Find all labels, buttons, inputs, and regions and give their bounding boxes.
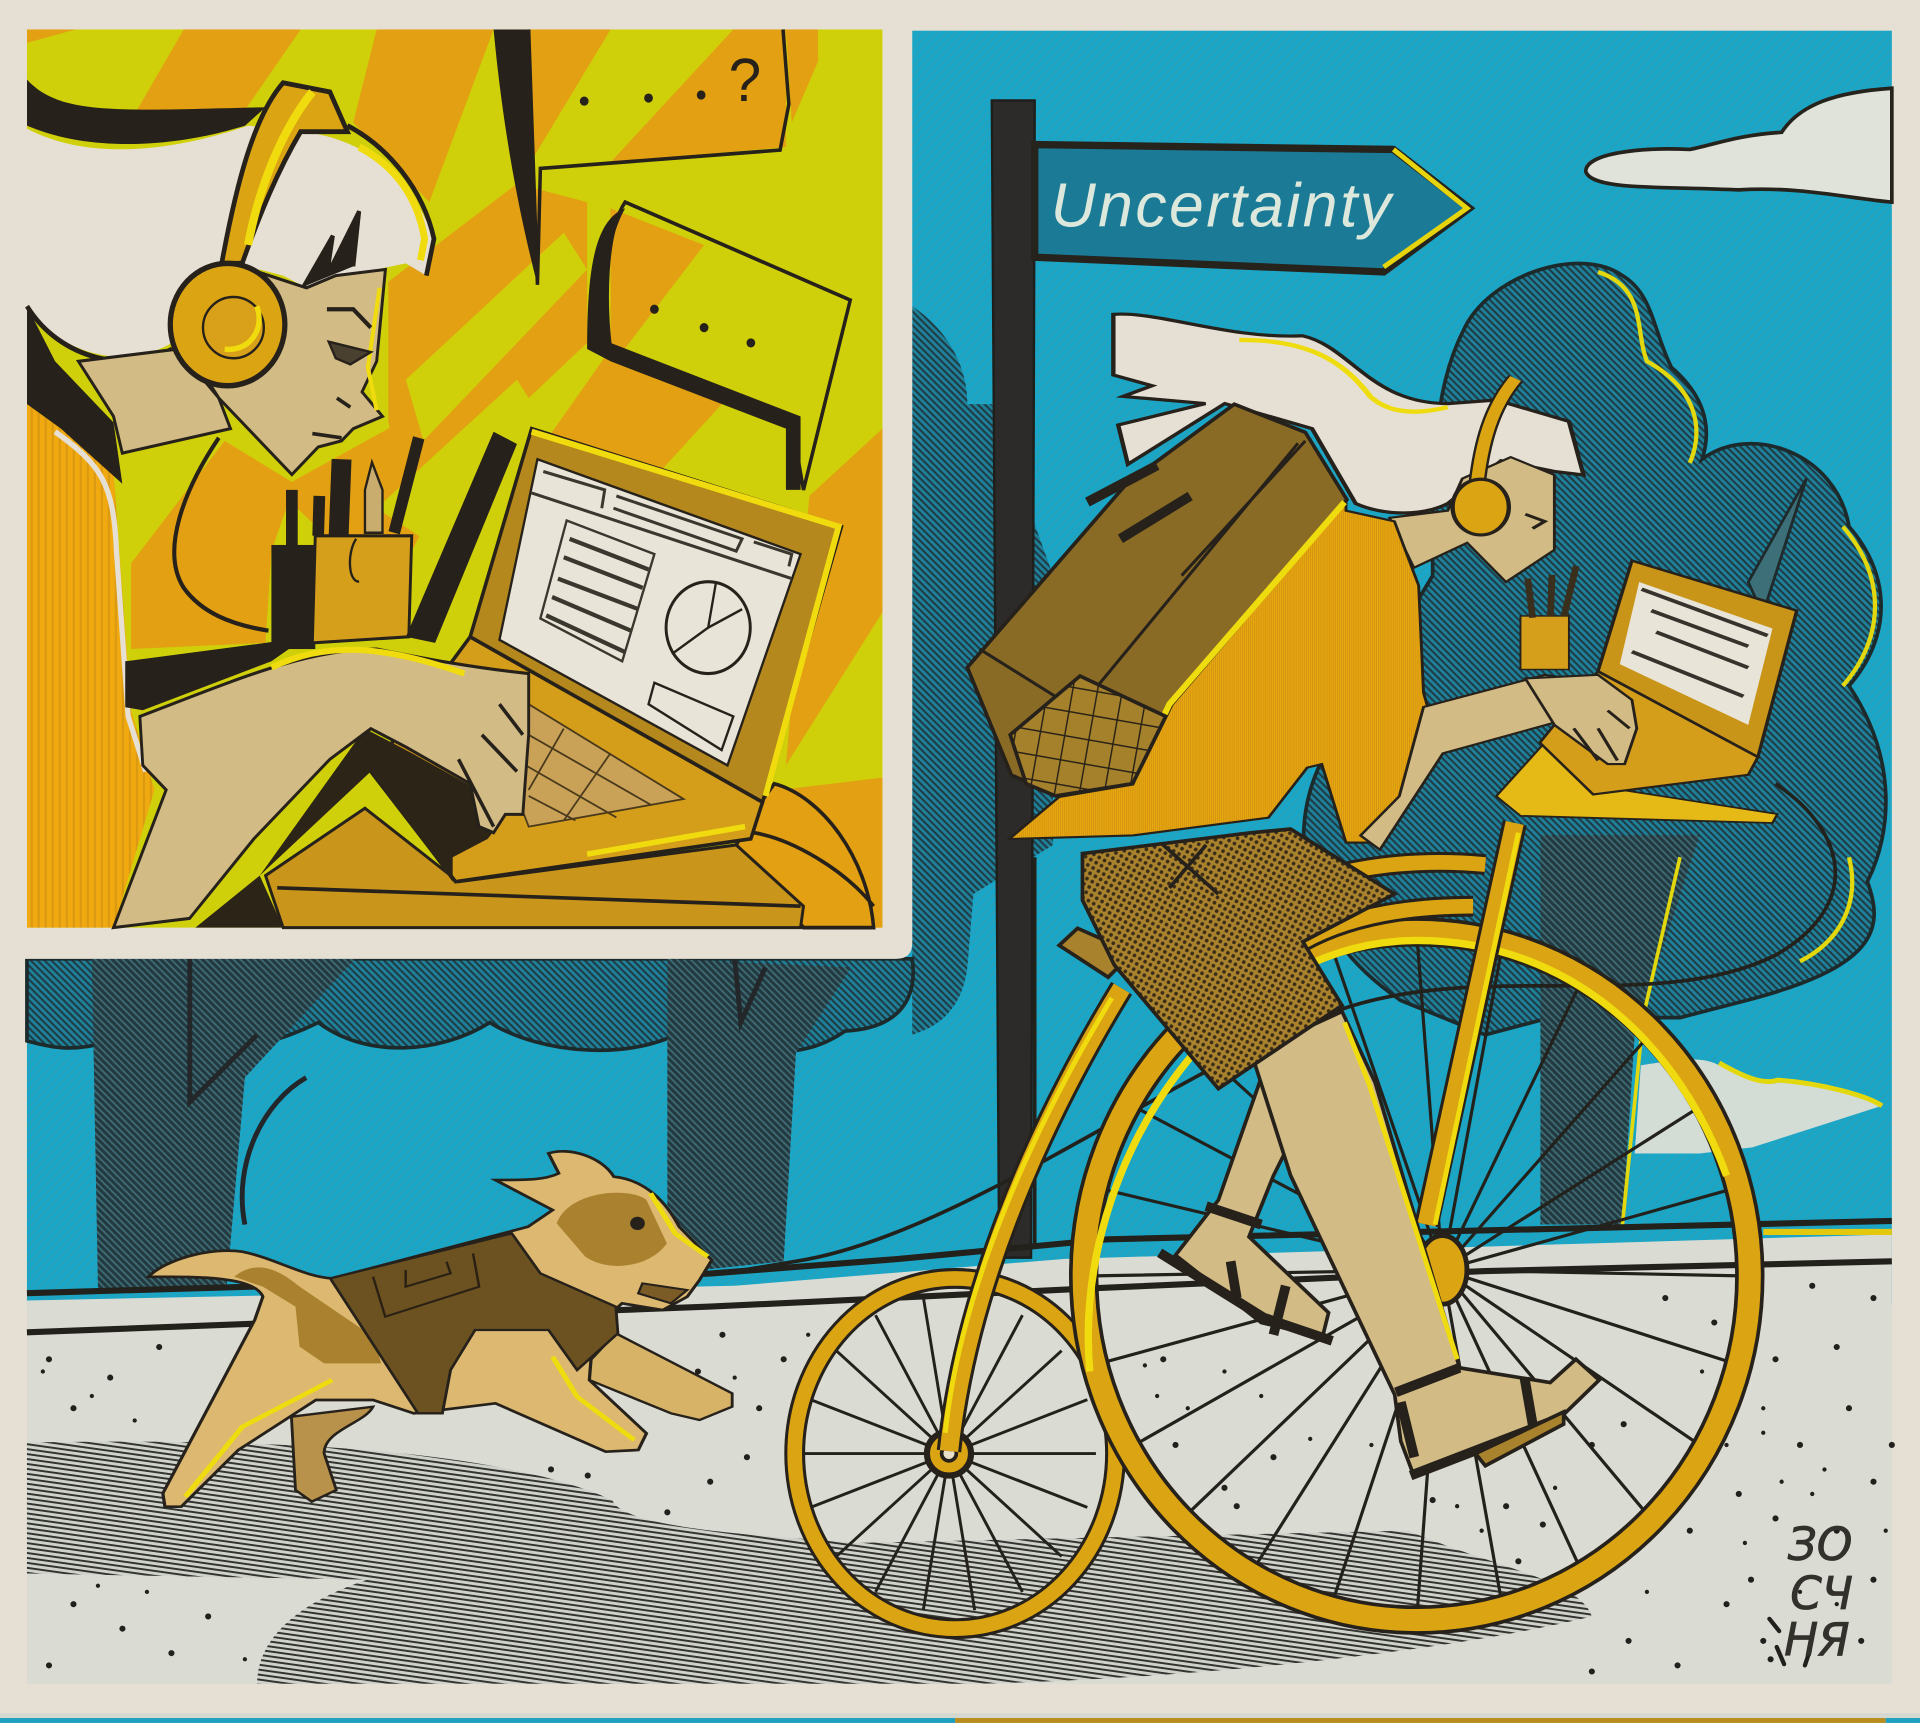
card on screen: [649, 683, 733, 750]
black hair streak: [27, 80, 266, 144]
orange torso: [27, 404, 154, 928]
pie chart on screen: [666, 582, 750, 674]
sign text: Uncertainty: [1051, 171, 1395, 241]
hair: [1113, 314, 1583, 513]
canopy highlight: [1598, 272, 1875, 961]
text block on screen: [540, 520, 654, 661]
laptop back: [406, 432, 517, 643]
inset border: [0, 0, 912, 959]
tree: right canopy: [1304, 263, 1886, 1035]
laptop lid: [470, 429, 841, 802]
eye: [1525, 514, 1545, 529]
face highlight: [368, 288, 380, 410]
sole block: [1476, 1412, 1564, 1466]
brown patch: head: [557, 1193, 667, 1266]
yellow stripes: [377, 233, 587, 539]
power cable: [722, 784, 1835, 1274]
headphones cup: [170, 263, 285, 386]
pack highlight: [1133, 502, 1344, 781]
arm: [114, 649, 529, 928]
pack fold: [980, 441, 1305, 710]
screen lines: [1632, 589, 1768, 696]
tree: lower left canopy: [27, 959, 913, 1056]
small wheel spokes: [802, 1297, 1096, 1610]
body: [149, 1151, 712, 1507]
speckles: [49, 1286, 1892, 1672]
mouth: [638, 1283, 687, 1303]
straps: [1087, 465, 1190, 539]
shirt: [1009, 500, 1438, 843]
vest: [330, 1233, 618, 1413]
sky: [27, 31, 1892, 1304]
pavement: [27, 1221, 1892, 1684]
big wheel spokes: [1086, 933, 1747, 1619]
tree trunk: right: [1540, 835, 1700, 1225]
panel: outdoor scene: [27, 31, 1892, 1304]
desk edge: [277, 888, 801, 906]
keyboard: [517, 704, 684, 827]
tree trunk: left: [92, 959, 355, 1288]
arm highlight: [271, 650, 464, 674]
hair highlight: [359, 147, 425, 260]
bottom edge strip: [0, 1713, 1920, 1723]
signpost: [992, 100, 1469, 1258]
headphones band: [222, 83, 347, 263]
front leg and foot: [1251, 1012, 1599, 1477]
pole behind laptop: [1748, 479, 1806, 614]
cloud: lower right: [1635, 1059, 1882, 1154]
lid yellow edge: [532, 432, 839, 796]
black shoulder: [27, 306, 122, 484]
rider upper body: [1009, 314, 1806, 850]
kerb lines: [27, 1221, 1892, 1332]
neck: [78, 349, 230, 453]
signature line 3: НЯ: [1784, 1614, 1850, 1667]
highlight: [185, 1193, 708, 1497]
nostril and mouth: [312, 398, 350, 438]
face: [195, 269, 385, 475]
branch lines: [190, 959, 765, 1225]
trunk highlight: [1622, 857, 1680, 1225]
big wheel highlight: [1088, 940, 1727, 1372]
hatched shadow: [27, 1442, 1592, 1684]
pencil cup: [271, 438, 419, 649]
signature: [1784, 1518, 1853, 1667]
cloud highlight: [1719, 1063, 1882, 1106]
inset artwork: [27, 29, 882, 928]
back leg: [1176, 1078, 1329, 1337]
speech bubble: question: [494, 29, 789, 285]
seat: [1059, 928, 1133, 977]
frame outline: [949, 823, 1515, 1451]
sign board: [1035, 145, 1469, 272]
inset panel: close-up: [0, 0, 912, 959]
signature line 1: ЗО: [1788, 1518, 1852, 1571]
penny-farthing bicycle: [795, 823, 1750, 1629]
laptop screen: [1620, 582, 1772, 725]
cloud: top right: [1586, 88, 1892, 202]
laptop lid: [1598, 561, 1797, 757]
black top: [125, 637, 306, 710]
small speckles: [43, 1335, 1886, 1665]
back far leg and paw: [291, 1407, 373, 1502]
fingers: [459, 704, 523, 827]
headphones band: [1477, 379, 1516, 486]
laptop base: [371, 637, 763, 882]
headphones cup: [1453, 479, 1509, 535]
eye: [630, 1217, 645, 1230]
inset background: [27, 29, 882, 928]
brow: [327, 309, 371, 328]
big wheel rim: [1084, 932, 1750, 1620]
eye: [329, 342, 371, 364]
tree: behind post: [912, 306, 1053, 1035]
desk: [266, 808, 803, 928]
tree trunk: centre: [667, 959, 851, 1274]
backpack: [967, 404, 1347, 796]
pens: [1528, 566, 1576, 618]
chair curve: [736, 784, 874, 928]
vest pocket: [373, 1253, 479, 1317]
neck and face: [1390, 457, 1554, 582]
fringe strands: [304, 211, 359, 287]
speech bubble: question: ?: [729, 46, 761, 114]
pack body: [967, 404, 1347, 796]
rider legs: [1082, 829, 1599, 1477]
signature line 2: СЧ: [1790, 1567, 1853, 1620]
hair: [27, 126, 434, 357]
orange stripes: [27, 29, 882, 928]
speech bubble: dots: [587, 202, 850, 490]
shorts tie: [1163, 845, 1218, 894]
shadow under hand: [195, 729, 511, 928]
sign highlight: [1384, 149, 1467, 267]
sleeve edge: [55, 432, 146, 772]
kerb highlight: [1763, 1229, 1892, 1234]
band highlight: [248, 92, 312, 245]
fingers: [1574, 711, 1630, 761]
dog: [149, 1151, 732, 1507]
pen cup: [1520, 616, 1569, 670]
frame colour: [949, 823, 1515, 1451]
laptop screen: [499, 459, 801, 765]
desk: [1496, 743, 1777, 823]
arm: [1361, 675, 1637, 850]
post side line: [1033, 857, 1036, 1249]
laptop base: [1540, 671, 1758, 794]
hub big wheel: [1418, 1236, 1467, 1304]
front sandal: [1396, 1368, 1560, 1476]
mesh pocket: [1010, 676, 1166, 796]
base highlight: [587, 827, 745, 854]
front leg highlight: [1344, 1023, 1457, 1359]
small wheel rim: [795, 1278, 1116, 1629]
back sandal: [1160, 1206, 1332, 1341]
frame highlight: [945, 833, 1518, 1433]
ground: [27, 1234, 1892, 1684]
far front leg: [581, 1333, 732, 1420]
brown patch: haunch: [234, 1267, 381, 1363]
chair inner line: [754, 833, 874, 906]
hand over keyboard: [1525, 675, 1637, 764]
hair highlight: [1239, 340, 1448, 412]
hub of small wheel: [927, 1432, 971, 1476]
hair outline: [27, 126, 434, 361]
headphone wire: [174, 438, 268, 631]
toolbar lines: [532, 472, 792, 579]
post: [992, 100, 1035, 1258]
shorts: [1082, 829, 1395, 1089]
